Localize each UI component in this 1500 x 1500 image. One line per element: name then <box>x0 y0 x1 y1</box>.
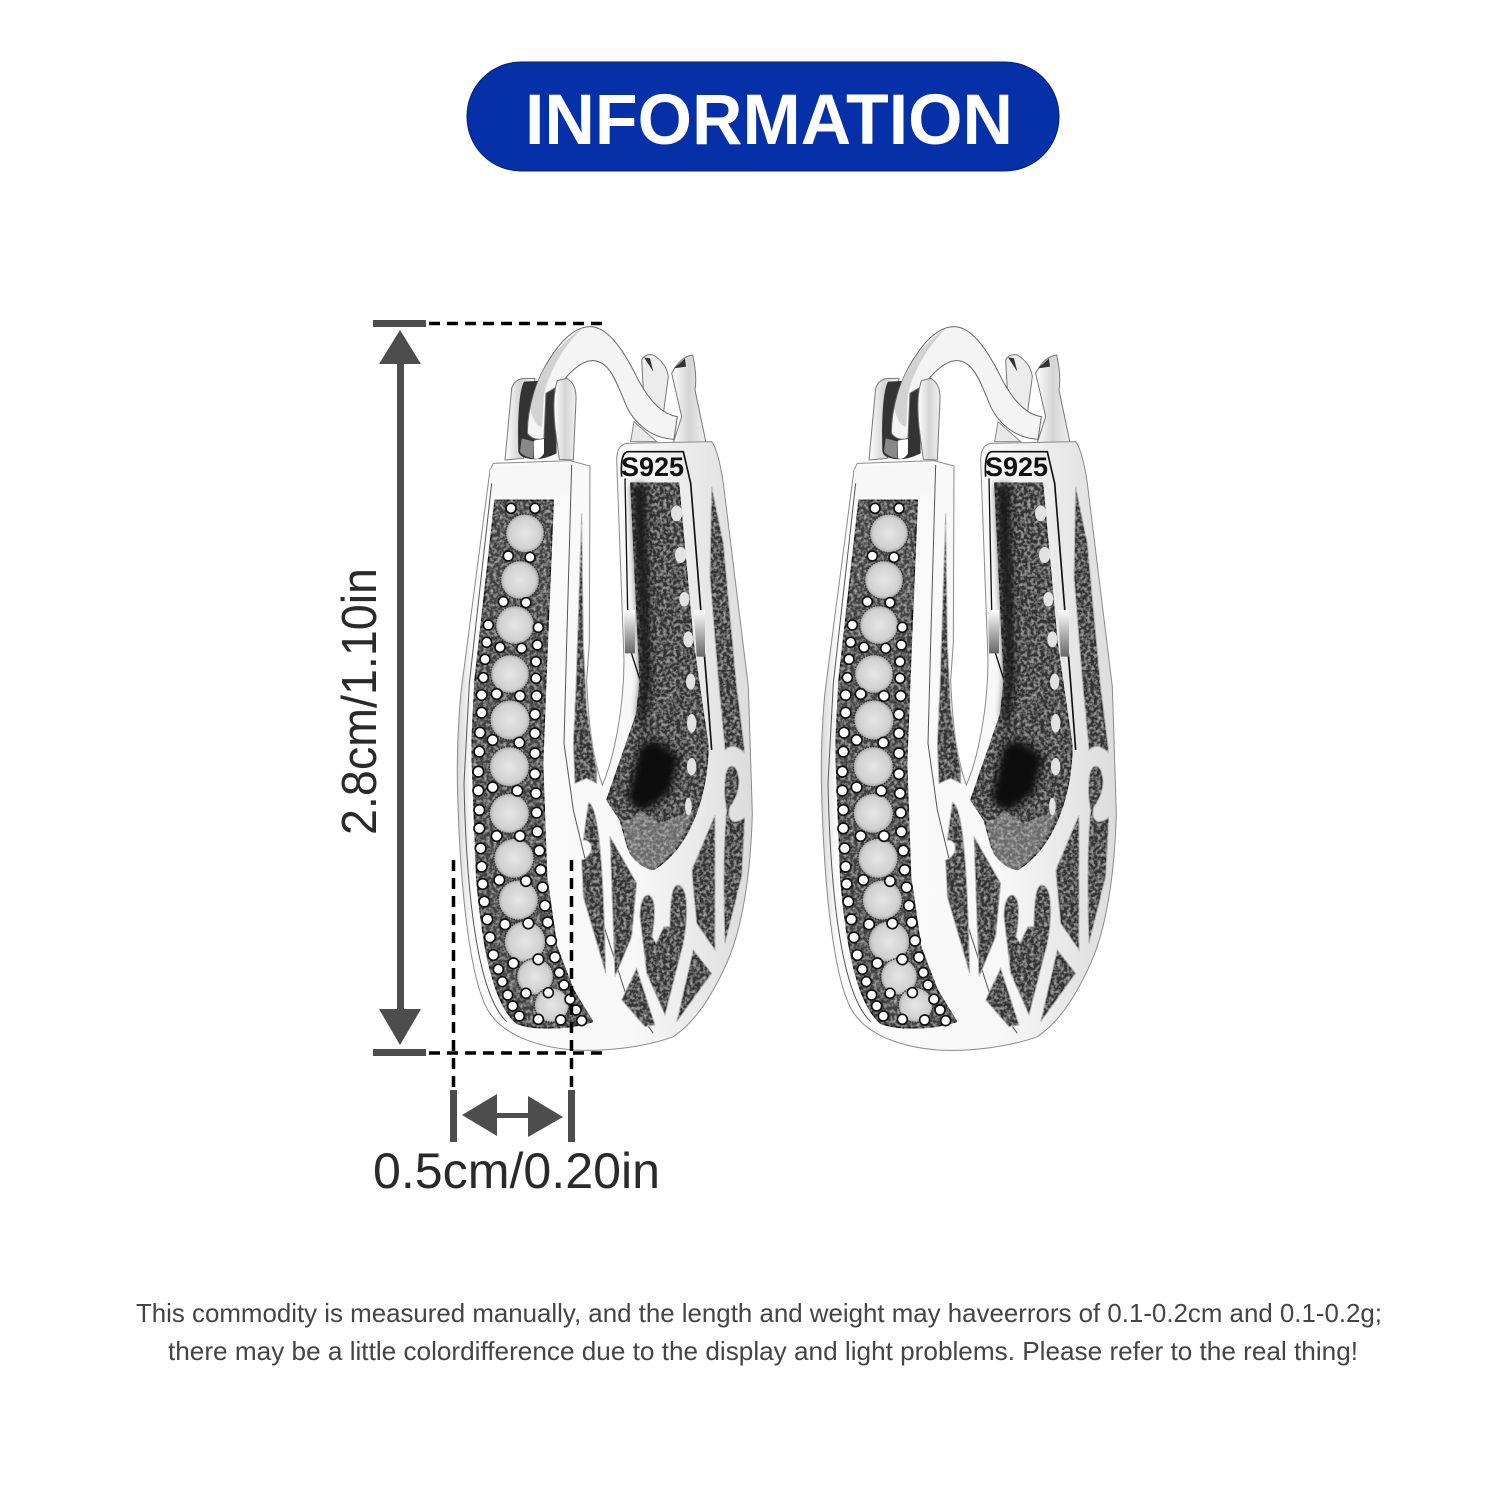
disclaimer note: This commodity is measured manually, and the length and weight may haveerrors of 0.1-0.2cm and 0.1-0.2g; <box>136 1298 1382 1328</box>
width dimension arrow <box>450 860 575 1142</box>
earring: left, with measurements <box>457 327 752 1050</box>
disclaimer note: there may be a little colordifference due to the display and light problems. Please refer to the real thing! <box>168 1336 1358 1366</box>
stamp: S925 right: S925 <box>985 452 1048 482</box>
width label: 0.5cm/0.20in <box>373 1143 660 1199</box>
stamp: S925 left: S925 <box>621 452 684 482</box>
title pill <box>467 62 1059 171</box>
title text: INFORMATION <box>525 81 1013 160</box>
height dimension arrow <box>373 320 603 1056</box>
earring: right <box>821 327 1116 1050</box>
height label: 2.8cm/1.10in <box>333 568 387 835</box>
disclaimer note <box>136 1298 1382 1366</box>
